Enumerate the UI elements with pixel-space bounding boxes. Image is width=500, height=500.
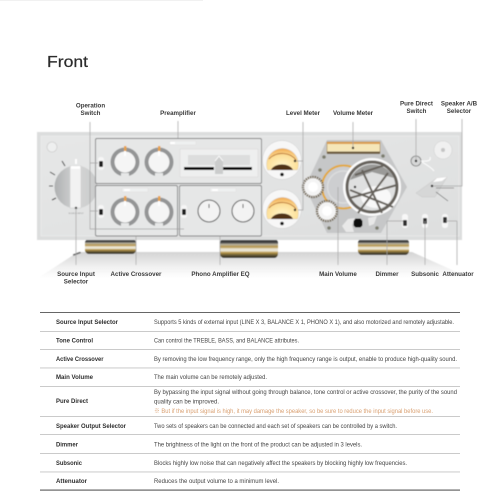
row: pure direct: By bypassing the input signal without going through balance, tone control or active crossover, the purity of the sound xyxy=(154,390,457,396)
mesh window xyxy=(343,158,401,216)
row: subsonic: Blocks highly low noise that can negatively affect the speakers by blocking highly low frequencies. xyxy=(154,461,407,467)
row: active crossover: Active Crossover xyxy=(56,357,104,363)
label: speaker selector: Selector xyxy=(447,108,472,115)
pure direct switch xyxy=(411,156,434,171)
row: main volume xyxy=(56,375,267,381)
label: pure direct switch: Switch xyxy=(407,108,427,115)
lower plate ornaments xyxy=(342,216,377,232)
row: dimmer: The brightness of the light on the front of the product can be adjusted in 3 levels. xyxy=(154,442,362,448)
row: dimmer: Dimmer xyxy=(56,442,79,448)
volume meter display xyxy=(327,142,380,154)
source input selector: SOURCE INPUT xyxy=(68,213,84,215)
speaker selector xyxy=(416,177,454,201)
balance slider xyxy=(180,149,258,177)
row: main volume: Main Volume xyxy=(56,375,94,381)
source input selector xyxy=(49,159,98,215)
row: attenuator xyxy=(56,479,279,485)
row: source input selector: Supports 5 kinds of external input (LINE X 3, BALANCE X 1, PHONO X 1), and also motorized and remotely adjustable. xyxy=(154,320,454,326)
label: source input selector: Selector xyxy=(64,278,89,285)
crossover switch xyxy=(98,205,104,218)
row: tone control: Can control the TREBLE, BASS, and BALANCE attributes. xyxy=(154,338,299,344)
row: speaker output selector: Speaker Output Selector xyxy=(56,424,127,430)
panel: preamplifier xyxy=(96,138,262,184)
label: speaker selector: Speaker A/B xyxy=(441,100,477,108)
phono knob 1 xyxy=(198,200,220,222)
label: level meter: Level Meter xyxy=(286,110,321,117)
row: speaker output selector xyxy=(56,424,397,430)
front panel xyxy=(37,132,462,240)
floor shadow xyxy=(38,252,470,278)
dimmer toggle xyxy=(402,214,408,228)
row: attenuator: Attenuator xyxy=(56,479,88,485)
small knob: lower xyxy=(317,201,337,221)
specification table xyxy=(40,312,460,491)
row: pure direct: Pure Direct xyxy=(56,399,88,405)
leader dots xyxy=(294,147,433,211)
tone switch xyxy=(98,157,104,170)
callout labels xyxy=(57,100,478,285)
title: Front xyxy=(47,54,89,71)
label: phono amplifier EQ: Phono Amplifier EQ xyxy=(191,271,250,278)
row: source input selector: Source Input Selector xyxy=(56,320,119,326)
row: tone control xyxy=(56,338,299,344)
row: pure direct xyxy=(56,390,457,415)
label: operation switch: Switch xyxy=(81,110,101,117)
row: dimmer xyxy=(56,442,362,448)
phono switch xyxy=(181,205,187,218)
gain knob xyxy=(144,196,174,226)
level meter: bottom xyxy=(262,190,302,228)
panel: active crossover xyxy=(96,186,178,236)
label: main volume: Main Volume xyxy=(319,271,357,278)
main volume gold ring xyxy=(322,166,365,208)
label: attenuator: Attenuator xyxy=(442,271,474,278)
top strip xyxy=(0,0,203,1)
label: source input selector: Source Input xyxy=(57,271,95,278)
logo emblem xyxy=(47,142,57,152)
small knob: upper xyxy=(303,177,323,197)
label: dimmer: Dimmer xyxy=(375,271,399,278)
row: speaker output selector: Two sets of speakers can be connected and each set of speakers can be controlled by a switch. xyxy=(154,424,397,430)
label: volume meter: Volume Meter xyxy=(333,110,374,117)
leader lines xyxy=(76,119,462,265)
phono knob 2 xyxy=(232,200,254,222)
subsonic toggle xyxy=(422,214,428,228)
label: pure direct switch: Pure Direct xyxy=(400,100,433,108)
row: main volume: The main volume can be remotely adjusted. xyxy=(154,375,267,381)
row: active crossover: By removing the low frequency range, only the high frequency range is output, enable to produce high-quality sound. xyxy=(154,357,457,363)
treble knob xyxy=(144,146,174,176)
level meter: top xyxy=(262,140,302,180)
foot: left xyxy=(73,239,136,256)
row: tone control: Tone Control xyxy=(56,338,93,344)
row: attenuator: Reduces the output volume to a minimum level. xyxy=(154,479,279,485)
table rules xyxy=(40,312,460,491)
attenuator toggle xyxy=(442,214,448,228)
bass knob xyxy=(110,146,140,176)
silver disc xyxy=(434,141,452,159)
label: active crossover: Active Crossover xyxy=(111,271,162,278)
amplifier front illustration xyxy=(37,119,470,278)
row: pure direct: quality can be improved. xyxy=(154,400,219,406)
row: subsonic: Subsonic xyxy=(56,461,83,467)
row: pure direct: ※ But if the input signal is high, it may damage the speaker, so be sure to reduce the input signal before use. xyxy=(154,408,433,415)
hexagon plate xyxy=(305,140,407,233)
label: subsonic: Subsonic xyxy=(411,271,439,278)
foot: centre xyxy=(220,239,278,258)
frequency knob xyxy=(110,196,140,226)
panel: phono amplifier EQ xyxy=(180,186,262,236)
label: operation switch: Operation xyxy=(76,102,105,110)
label: preamplifier: Preamplifier xyxy=(160,110,196,117)
foot: right xyxy=(358,239,409,255)
